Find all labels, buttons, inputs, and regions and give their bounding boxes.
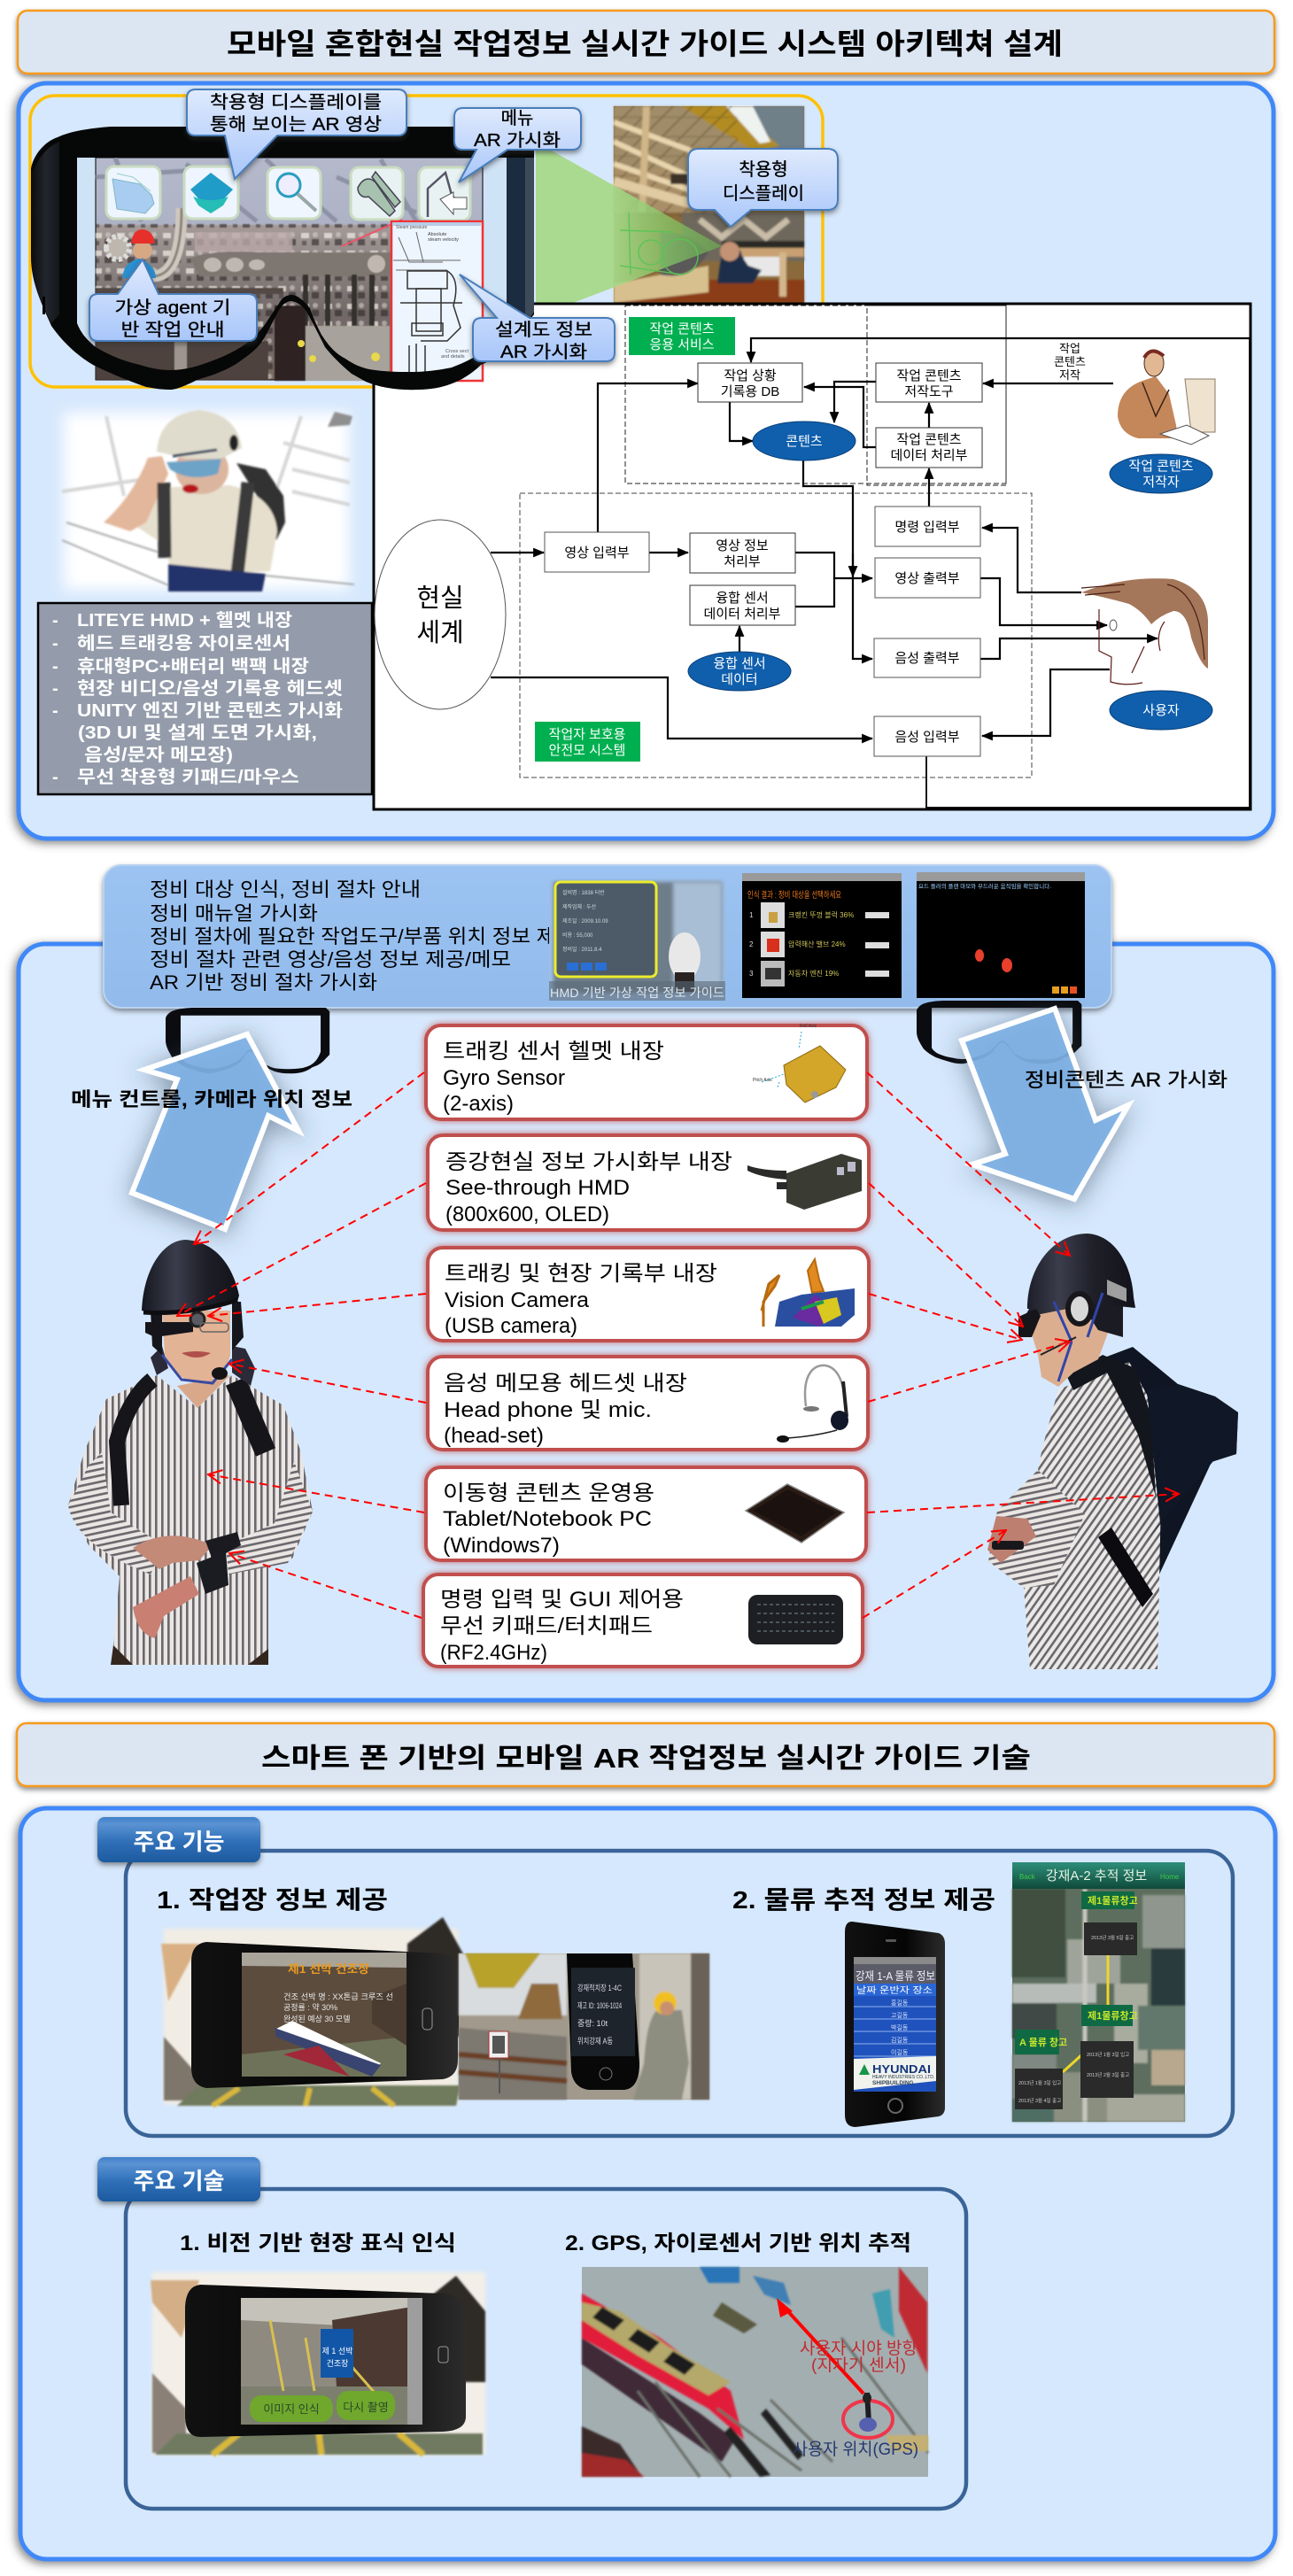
panel: maintenance functions bar <box>104 865 1111 1008</box>
text box: hardware list: - <box>52 701 58 721</box>
image: tracking map: 제1물류창고 <box>1088 1894 1138 1907</box>
text box: hardware list <box>38 603 372 794</box>
text box: hardware list: - <box>52 679 58 699</box>
box: headset: 음성 메모용 헤드셋 내장 <box>444 1372 687 1396</box>
box: headset: Head phone 및 mic. <box>444 1398 652 1422</box>
schematic drawing overlay: Steam pressure <box>396 225 428 230</box>
green label: content service: 작업 콘텐츠 <box>649 321 715 337</box>
photo: worker with helmet HMD <box>62 410 354 592</box>
block: DB <box>698 363 802 402</box>
image: tracking map: A 물류 창고 <box>1019 2036 1067 2048</box>
box: keypad <box>423 1574 863 1667</box>
image: recognition result screen: 3 <box>749 970 754 978</box>
ellipse: real world: 세계 <box>416 619 464 647</box>
icon: gyro block <box>753 1024 846 1102</box>
box: vision camera: (USB camera) <box>445 1314 577 1338</box>
image: tracking map: 2013년 1월 3일 입고 <box>1018 2079 1061 2086</box>
image: HMD guide view: 설비명 : 1838 터빈 <box>562 889 605 896</box>
heading: logistics tracking: 2. 물류 추적 정보 제공 <box>732 1886 995 1914</box>
callout: menu AR: 메뉴 <box>501 108 533 128</box>
text box: hardware list: (3D UI 및 설계 도면 가시화, <box>78 723 317 743</box>
image: tracking map: Home <box>1160 1873 1180 1881</box>
image: phone with sign recognition: 다시 촬영 <box>343 2401 389 2414</box>
title: top heading: 모바일 혼합현실 작업정보 실시간 가이드 시스템 아키텍쳐 설계 <box>227 27 1063 60</box>
image: tracking map: Back <box>1019 1873 1036 1881</box>
image: phone with sign recognition: 제 1 선박 <box>322 2347 352 2356</box>
image: HMD guide view: 제작업체 : 두산 <box>562 903 597 910</box>
callout: wearable display: 착용형 <box>739 159 788 180</box>
image: shipyard aerial with GPS: (지자기 센서) <box>811 2356 906 2375</box>
block: command input <box>875 507 980 546</box>
image: logistics worker with QR code: 중량: 10t <box>577 2018 608 2028</box>
image: tracking map: 2013년 2월 3일 출고 <box>1087 2071 1129 2078</box>
block: authoring tool: 작업 콘텐츠 <box>896 368 962 383</box>
tab: key technologies: 주요 기술 <box>134 2168 224 2194</box>
block: command input: 명령 입력부 <box>894 520 960 535</box>
icon: small goggles left <box>166 1008 329 1073</box>
image: phone with shipyard AR: 건조 선박 명 : XX톤급 크루즈 선 <box>283 1992 393 2001</box>
label: content authoring <box>1054 342 1086 382</box>
callout: AR image through display <box>187 89 406 179</box>
text box: hardware list: 헤드 트래킹용 자이로센서 <box>77 633 290 654</box>
icon: tools <box>351 167 403 220</box>
image: recognition result screen: 인식 결과 : 정비 대상을 선택하세요 <box>747 889 841 901</box>
panel: maintenance system <box>19 944 1274 1700</box>
image: phone with logistics table: 이길동 <box>891 2048 909 2056</box>
panel: maintenance functions bar: AR 기반 정비 절차 가시화 <box>150 971 377 994</box>
block: audio input: 음성 입력부 <box>894 730 960 745</box>
image: shipyard aerial with GPS: 사용자 위치(GPS) <box>793 2440 918 2459</box>
text box: hardware list: - <box>52 611 58 630</box>
box: see-through HMD <box>428 1135 869 1230</box>
panel: maintenance functions bar: 정비 대상 인식, 정비 절차 안내 <box>150 878 421 901</box>
image: phone with shipyard AR <box>161 1917 465 2106</box>
image: tracking map <box>1012 1862 1185 2122</box>
block: video info processing: 영상 정보 <box>716 538 769 553</box>
text box: hardware list: LITEYE HMD + 헬멧 내장 <box>77 610 292 630</box>
panel: smartphone AR <box>20 1808 1275 2559</box>
box: vision camera: Vision Camera <box>445 1288 590 1312</box>
box: gyro sensor: Gyro Sensor <box>443 1066 565 1090</box>
image: logistics worker with QR code: 재고 ID: 1006-1024 <box>577 2001 622 2010</box>
block: video input: 영상 입력부 <box>564 545 630 561</box>
block: DB: 작업 상황 <box>724 368 777 383</box>
callout: wearable display: 디스플레이 <box>723 183 804 204</box>
image: phone with logistics table: 김길동 <box>891 2037 909 2044</box>
image: tracking map: 2013년 3월 5일 출고 <box>1091 1934 1134 1941</box>
box: see-through HMD: See-through HMD <box>445 1176 630 1200</box>
block: video output: 영상 출력부 <box>894 571 960 586</box>
ellipse: author <box>1110 454 1212 493</box>
icon: magnifier <box>267 167 321 219</box>
ellipse: contents <box>753 422 856 460</box>
callout: virtual agent guide <box>89 259 257 341</box>
image: phone with logistics table: HEAVY INDUSTRIES CO.,LTD. <box>872 2075 934 2080</box>
figure: person front view <box>68 1240 313 1665</box>
connectors <box>491 338 1250 808</box>
title: smartphone section heading: 스마트 폰 기반의 모바일 AR 작업정보 실시간 가이드 기술 <box>261 1743 1031 1774</box>
panel: HMD view frame <box>30 96 823 387</box>
image: HMD guide view: 제조일 : 2009.10.09 <box>562 917 608 924</box>
leader lines: left <box>177 1072 426 1618</box>
schematic drawing overlay: steam velocity <box>428 237 459 243</box>
text box: hardware list: UNITY 엔진 기반 콘텐츠 가시화 <box>77 700 343 721</box>
box: gyro sensor: (2-axis) <box>443 1092 514 1116</box>
green label: helmet system: 안전모 시스템 <box>549 743 625 758</box>
box: headset <box>428 1357 868 1450</box>
box: vision camera: 트래킹 및 현장 기록부 내장 <box>445 1262 717 1286</box>
image: HMD guide view: 정비일 : 2011.8.4 <box>562 946 602 953</box>
image: phone with shipyard AR: 공정률 : 약 30% <box>283 2002 337 2012</box>
block: sensor data processing <box>690 585 795 625</box>
schematic drawing overlay: Cross sect <box>445 349 468 354</box>
block: content data processing: 데이터 처리부 <box>891 448 968 463</box>
icon: graduation cap <box>184 166 238 219</box>
image: phone with sign recognition: 이미지 인식 <box>263 2402 320 2416</box>
block: video output <box>875 558 980 598</box>
image: tracking map: 제1물류창고 <box>1088 2009 1138 2022</box>
box: vision camera <box>428 1248 869 1341</box>
box: headset: (head-set) <box>444 1424 544 1448</box>
block: audio input <box>874 716 980 756</box>
image: phone with sign recognition: 건조장 <box>327 2359 348 2368</box>
label: menu control: 메뉴 컨트롤, 카메라 위치 정보 <box>71 1088 352 1110</box>
icon: exit arrow <box>419 167 470 220</box>
image: tracking map: 2013년 1월 3일 입고 <box>1087 2051 1129 2058</box>
image: phone with shipyard AR: 제1 선박 건조장 <box>288 1962 369 1976</box>
title: top heading <box>18 11 1274 73</box>
label: maintenance content AR: 정비콘텐츠 AR 가시화 <box>1025 1069 1227 1091</box>
icon: headset <box>777 1365 848 1443</box>
schematic drawing overlay <box>391 221 483 381</box>
image: logistics worker with QR code: 강재적치장 1-4C <box>577 1983 622 1992</box>
heading: GPS gyro tracking: 2. GPS, 자이로센서 기반 위치 추적 <box>565 2232 911 2255</box>
label: content authoring: 작업 <box>1059 342 1080 355</box>
image: phone with sign recognition <box>151 2272 485 2455</box>
image: tracking map: 강재A-2 추적 정보 <box>1046 1868 1147 1884</box>
box: gyro sensor <box>426 1024 867 1119</box>
image: phone with logistics table: 박길동 <box>891 2023 909 2031</box>
block: authoring tool <box>876 363 982 402</box>
box: keypad: 명령 입력 및 GUI 제어용 <box>440 1588 684 1612</box>
image: tracking map: 2013년 3월 4일 출고 <box>1018 2097 1061 2104</box>
block: video info processing <box>690 533 795 573</box>
icon: tablet <box>746 1484 844 1543</box>
panel: system architecture <box>19 83 1274 839</box>
icon: gyro block: Roll Axis <box>800 1024 817 1029</box>
ellipse: sensor data: 융합 센서 <box>713 656 766 671</box>
callout: blueprint AR <box>460 275 615 362</box>
block: video input <box>545 532 649 572</box>
box: see-through HMD: 증강현실 정보 가시화부 내장 <box>445 1150 732 1174</box>
text box: hardware list: 현장 비디오/음성 기록용 헤드셋 <box>77 678 343 699</box>
block: authoring tool: 저작도구 <box>904 384 954 399</box>
image: shipyard aerial with GPS <box>582 2267 928 2477</box>
panel: maintenance functions bar: 정비 절차에 필요한 작업도구/부품 위치 정보 제공 <box>150 925 575 948</box>
callout: blueprint AR: 설계도 정보 <box>495 320 592 340</box>
image: logistics worker with QR code: 위치강재 A동 <box>577 2036 613 2046</box>
callout: AR image through display: 착용형 디스플레이를 <box>210 92 382 112</box>
green label: helmet system <box>535 722 640 762</box>
text box: hardware list: - <box>52 657 58 677</box>
callout: virtual agent guide: 가상 agent 기 <box>115 298 230 318</box>
block: DB: 기록용 DB <box>721 384 779 399</box>
panel: maintenance functions bar: 정비 절차 관련 영상/음성 정보 제공/메모 <box>150 948 511 971</box>
icon: user profile <box>1081 578 1208 685</box>
section frame: key functions <box>97 1817 1233 2136</box>
image: shipyard aerial with GPS: 사용자 시야 방향 <box>800 2339 917 2358</box>
ellipse: author: 저작자 <box>1142 475 1180 490</box>
image: recognition result screen: 1 <box>749 911 754 919</box>
tab: key functions: 주요 기능 <box>134 1829 224 1855</box>
text box: hardware list: 무선 착용형 키패드/마우스 <box>77 767 299 787</box>
ellipse: real world: 현실 <box>416 584 464 613</box>
image: phone with logistics table <box>845 1922 945 2127</box>
image: recognition result screen: 압력해산 밸브 24% <box>788 940 846 948</box>
arrow: up to HMD <box>132 1034 298 1229</box>
panel: maintenance functions bar: 정비 매뉴얼 가시화 <box>150 902 318 924</box>
image: phone with logistics table: 홍길동 <box>891 1999 909 2007</box>
dashed service boxes <box>520 306 1032 777</box>
box: tablet <box>426 1467 866 1560</box>
callout: wearable display <box>688 149 838 227</box>
diagram: system architecture block diagram <box>374 304 1250 809</box>
image: HMD guide view: HMD 기반 가상 작업 정보 가이드 <box>550 986 724 1000</box>
ellipse: author: 작업 콘텐츠 <box>1128 459 1194 474</box>
tab: key technologies <box>97 2157 260 2201</box>
text box: hardware list: 휴대형PC+배터리 백팩 내장 <box>77 656 309 677</box>
leader lines: right <box>863 1072 1179 1618</box>
image: phone with shipyard AR: 완성된 예상 30 모델 <box>283 2014 350 2023</box>
icon: keyboard <box>748 1595 843 1644</box>
photo: factory with worker wearing display <box>536 106 804 317</box>
section frame: key technologies <box>97 2157 966 2509</box>
icon: HMD device <box>747 1154 862 1210</box>
text box: hardware list: - <box>52 768 58 787</box>
image: recognition result screen: 자동차 엔진 19% <box>788 969 839 978</box>
green viewing frustum <box>536 142 722 317</box>
ellipse: sensor data <box>688 652 791 691</box>
image: phone with logistics table: HYUNDAI <box>872 2062 931 2076</box>
box: gyro sensor: 트래킹 센서 헬멧 내장 <box>443 1040 664 1064</box>
icon: gyro block: Pitch Axis <box>753 1078 772 1083</box>
block: audio output: 음성 출력부 <box>894 651 960 666</box>
heading: worksite info: 1. 작업장 정보 제공 <box>157 1886 388 1914</box>
box: see-through HMD: (800x600, OLED) <box>445 1203 609 1226</box>
block: sensor data processing: 데이터 처리부 <box>704 607 781 622</box>
image: AR view through HMD <box>96 158 483 381</box>
callout: menu AR: AR 가시화 <box>474 130 561 151</box>
ellipse: user <box>1110 691 1212 730</box>
image: phone with logistics table: 강재 1-A 물류 정보 <box>856 1969 935 1983</box>
image: phone with logistics table: SHIPBUILDING <box>872 2080 914 2086</box>
ellipse: user: 사용자 <box>1142 703 1180 718</box>
callout: menu AR <box>454 108 581 182</box>
image: AR guidance screen: 요드 플러의 플랜 마모와 부드러운 움직임을 확인합니다. <box>918 882 1051 890</box>
pale lens strip <box>77 158 507 335</box>
green label: helmet system: 작업자 보호용 <box>549 727 625 742</box>
image: AR guidance screen <box>917 872 1085 998</box>
icon: author at computer <box>1118 350 1215 445</box>
icon: robots <box>762 1259 855 1327</box>
icon: goggle frame <box>31 127 534 390</box>
label: content authoring: 저작 <box>1059 368 1080 382</box>
ellipse: contents: 콘텐츠 <box>786 434 823 449</box>
title: smartphone section heading <box>17 1723 1274 1786</box>
schematic drawing overlay: Absolute <box>428 232 446 237</box>
image: HMD guide view: 비용 : 55,000 <box>562 932 593 939</box>
callout: AR image through display: 통해 보이는 AR 영상 <box>210 114 382 135</box>
box: keypad: 무선 키패드/터치패드 <box>440 1614 653 1638</box>
image: phone with logistics table: 날짜 운반자 장소 <box>856 1985 933 1996</box>
arrow: down to user <box>962 1009 1128 1199</box>
block: video info processing: 처리부 <box>724 554 761 569</box>
block: audio output <box>874 638 980 677</box>
box: tablet: Tablet/Notebook PC <box>443 1507 652 1531</box>
figure: person side view <box>987 1234 1238 1669</box>
box: keypad: (RF2.4GHz) <box>440 1641 547 1665</box>
ellipse: real world <box>375 520 506 709</box>
block: content data processing <box>876 428 982 468</box>
tab: key functions <box>97 1817 260 1862</box>
block: sensor data processing: 융합 센서 <box>716 591 769 606</box>
schematic drawing overlay: and details <box>441 354 465 360</box>
green label: content service: 응용 서비스 <box>649 337 715 352</box>
box: tablet: (Windows7) <box>443 1534 560 1558</box>
callout: virtual agent guide: 반 작업 안내 <box>120 320 225 340</box>
callout: blueprint AR: AR 가시화 <box>500 342 587 362</box>
block: content data processing: 작업 콘텐츠 <box>896 432 962 447</box>
green label: content service <box>629 317 735 355</box>
red link line <box>342 220 402 246</box>
text box: hardware list: 음성/문자 메모장) <box>84 745 233 765</box>
image: HMD guide view <box>549 879 725 1001</box>
image: recognition result screen: 크랭킨 뚜껑 블럭 36% <box>788 910 854 919</box>
icon: folder <box>106 166 160 219</box>
ellipse: sensor data: 데이터 <box>721 672 758 687</box>
image: recognition result screen: 2 <box>749 940 754 948</box>
icon: virtual agent <box>106 229 156 278</box>
label: content authoring: 콘텐츠 <box>1054 355 1086 368</box>
image: phone with logistics table: 고길동 <box>891 2012 909 2019</box>
box: tablet: 이동형 콘텐츠 운영용 <box>443 1481 654 1505</box>
icon: small goggles right <box>917 1001 1081 1064</box>
image: recognition result screen <box>742 873 902 998</box>
heading: vision recognition: 1. 비전 기반 현장 표식 인식 <box>180 2232 456 2255</box>
text box: hardware list: - <box>52 634 58 654</box>
image: logistics worker with QR code <box>459 1953 709 2100</box>
